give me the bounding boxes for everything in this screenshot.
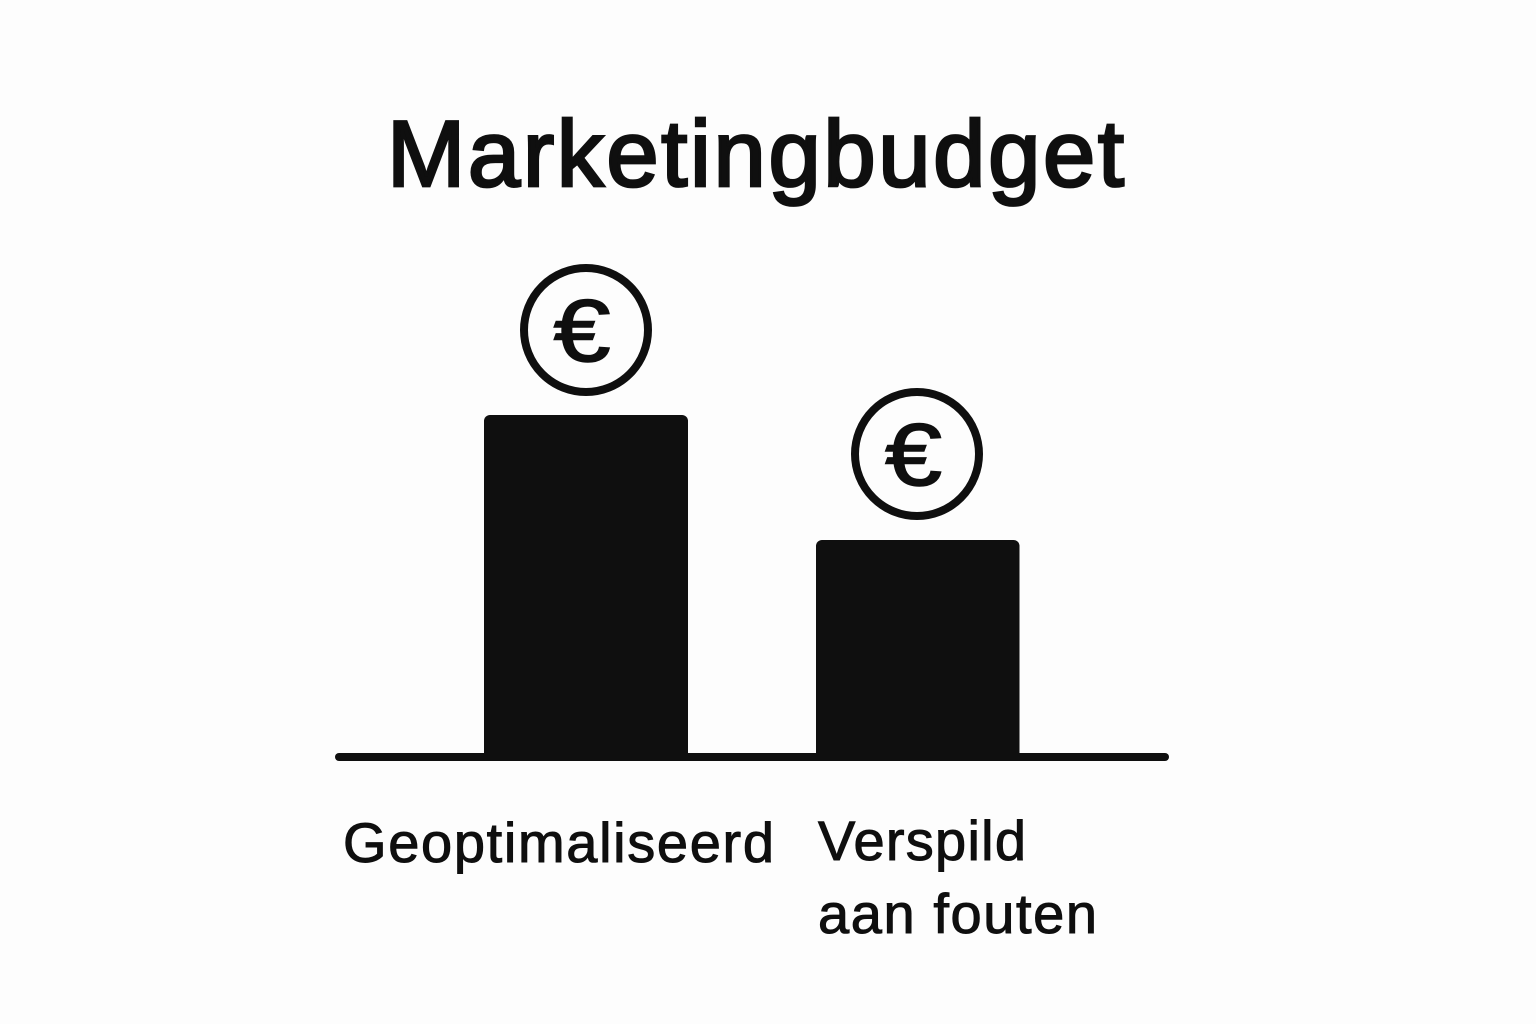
bar: verspild aan fouten xyxy=(816,540,1020,760)
title: Marketingbudget xyxy=(387,101,1124,206)
label: geoptimaliseerd: Geoptimaliseerd xyxy=(343,811,774,874)
icon: euro coin right: € xyxy=(885,407,942,504)
icon: euro coin left: € xyxy=(554,283,610,380)
bar: geoptimaliseerd xyxy=(484,415,688,760)
baseline axis xyxy=(335,753,1169,761)
label: verspild aan fouten: aan fouten xyxy=(818,882,1097,945)
icon: euro coin right xyxy=(855,392,979,516)
label: verspild aan fouten xyxy=(818,809,1097,945)
bar chart xyxy=(335,415,1169,761)
icon: euro coin left xyxy=(524,268,648,392)
label: verspild aan fouten: Verspild xyxy=(818,809,1026,872)
